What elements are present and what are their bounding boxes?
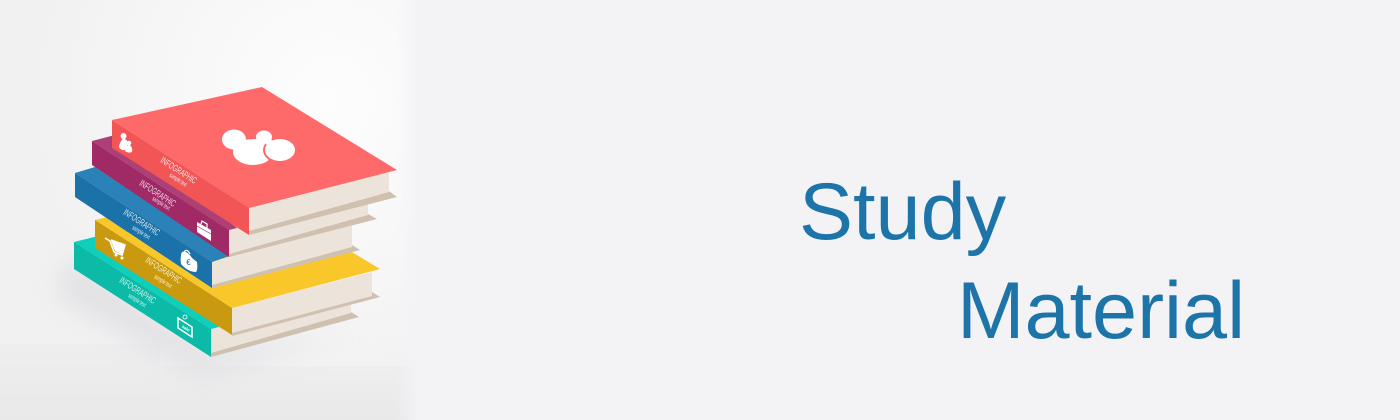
book: teal: sample text (127, 292, 147, 309)
book: blue: INFOGRAPHIC (121, 207, 162, 239)
book: yellow (95, 185, 380, 336)
title line: Material: Material (957, 266, 1245, 356)
icon: sale sign: sale (181, 324, 191, 333)
stack of books (74, 87, 397, 357)
icon: euro money bag: € (186, 258, 191, 267)
book: teal: INFOGRAPHIC (117, 275, 158, 307)
book: purple (92, 135, 377, 257)
book: yellow: INFOGRAPHIC (143, 255, 184, 287)
title (799, 167, 1245, 356)
book: teal (74, 234, 359, 357)
icon: large people on cover (222, 130, 297, 165)
icon: shopping cart (105, 238, 125, 260)
title line: Study: Study (799, 167, 1007, 257)
icon: briefcase (197, 221, 211, 241)
book: blue (75, 167, 360, 288)
book: purple: INFOGRAPHIC (137, 178, 178, 210)
book: blue: sample text (131, 224, 151, 241)
icon: sale sign (178, 315, 192, 337)
book: red: sample text (168, 172, 188, 189)
icon: small people on spine (119, 133, 132, 153)
book: yellow: sample text (153, 273, 173, 290)
book: red (112, 87, 397, 235)
icon: euro money bag (181, 250, 197, 272)
book: red: INFOGRAPHIC (158, 155, 199, 187)
book: purple: sample text (151, 195, 171, 212)
